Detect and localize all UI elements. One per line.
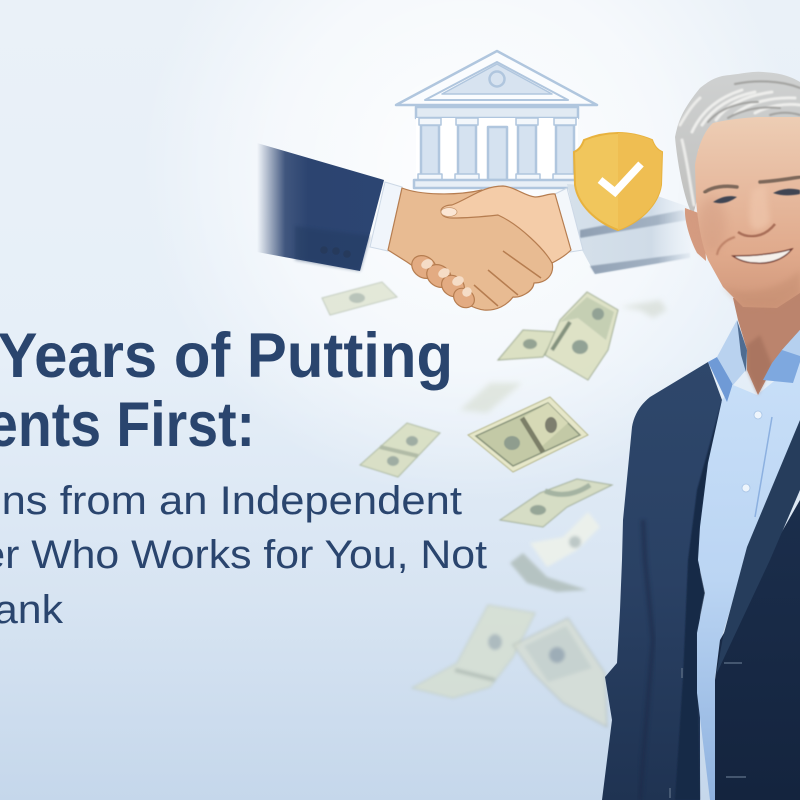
bill: upper left faded bbox=[322, 282, 397, 315]
nose highlight bbox=[750, 185, 770, 230]
hair strands bbox=[680, 81, 800, 205]
knuckle lines bbox=[474, 251, 541, 306]
right shirt cuff bbox=[555, 188, 583, 252]
smile lines bbox=[717, 237, 735, 255]
ear bbox=[685, 208, 706, 261]
right jacket body bbox=[715, 500, 800, 800]
subtitle bbox=[0, 478, 488, 632]
title bbox=[0, 321, 453, 460]
hair bbox=[675, 72, 800, 215]
bill: lower left large bbox=[412, 605, 535, 698]
right lapel bbox=[716, 420, 800, 675]
shirt placket line bbox=[755, 417, 772, 517]
eyebrows bbox=[705, 177, 800, 192]
icon: gold shield with check bbox=[574, 133, 662, 230]
mouth bbox=[733, 249, 792, 263]
bill: curved bbox=[500, 479, 612, 527]
fingers bbox=[407, 251, 478, 312]
bill: curved dark bbox=[510, 553, 587, 592]
bill: blurred white bbox=[530, 512, 600, 567]
falling dollar bills bbox=[322, 282, 667, 727]
upper right hand bbox=[441, 186, 571, 263]
handshake bbox=[388, 186, 571, 312]
shirt collar left bbox=[708, 320, 747, 402]
right suit sleeve bbox=[567, 184, 692, 274]
jacket sleeve and body left bbox=[602, 362, 722, 800]
jacket pocket slits and buttons bbox=[670, 663, 746, 798]
left shirt cuff bbox=[370, 182, 402, 251]
shirt collar right bbox=[763, 330, 800, 383]
dark gap beside shirt bbox=[675, 400, 722, 800]
left suit sleeve bbox=[257, 143, 384, 271]
chin shadow bbox=[723, 270, 800, 308]
bill: large centre bbox=[468, 397, 588, 472]
shirt bbox=[697, 360, 800, 800]
face bbox=[695, 117, 800, 308]
lower left hand bbox=[388, 188, 553, 310]
bill: left bbox=[360, 423, 440, 477]
bill: blurred middle bbox=[460, 383, 522, 413]
man portrait bbox=[602, 72, 800, 800]
thumb nail bbox=[441, 208, 457, 216]
bill: top right blurred bbox=[620, 300, 667, 318]
icon: bank building bbox=[396, 51, 597, 188]
shirt buttons bbox=[742, 411, 762, 492]
neck bbox=[733, 285, 800, 395]
bill: lower right large bbox=[513, 618, 607, 727]
eyes bbox=[713, 189, 800, 203]
sleeve seam shadow bbox=[640, 520, 653, 800]
fingernails bbox=[420, 257, 474, 299]
bill: folded top bbox=[498, 292, 618, 380]
cheek shading bbox=[698, 197, 726, 253]
under-nose shadow bbox=[738, 224, 775, 236]
